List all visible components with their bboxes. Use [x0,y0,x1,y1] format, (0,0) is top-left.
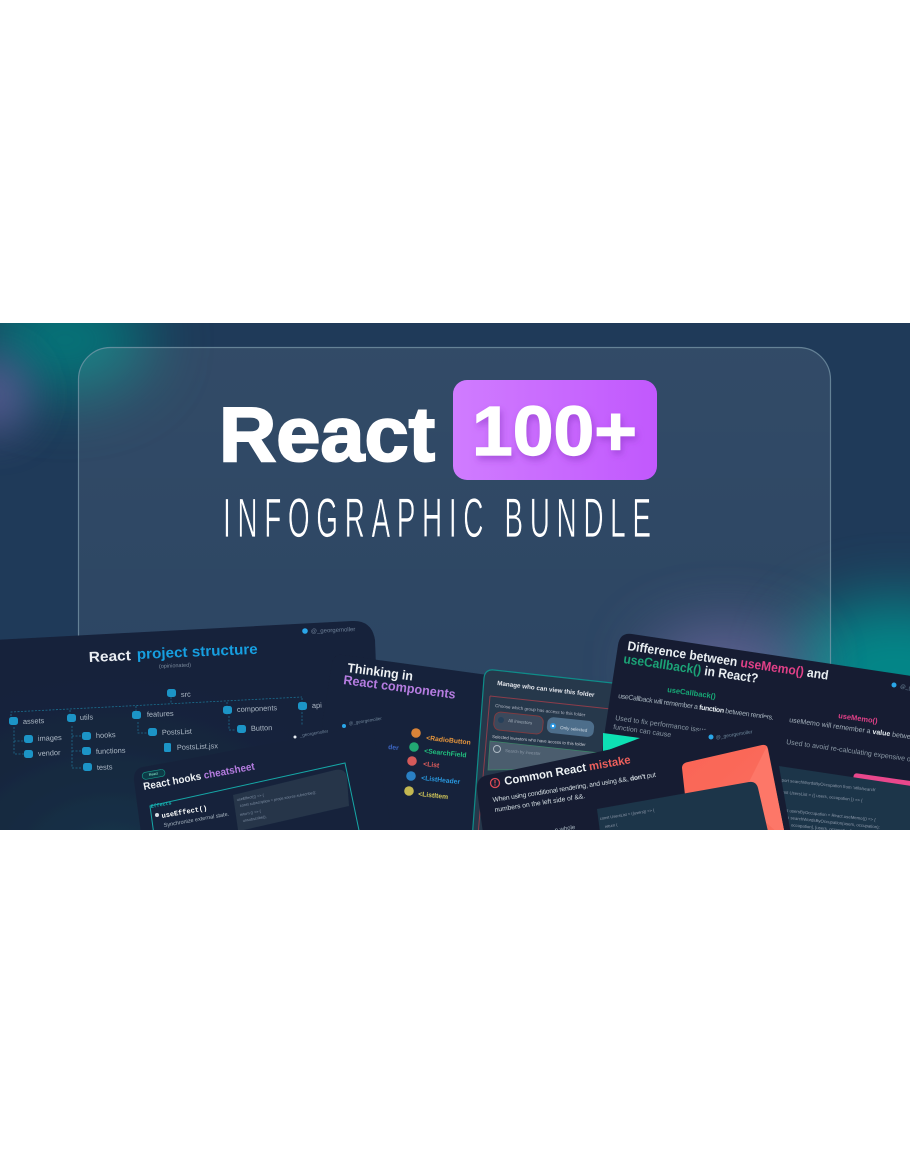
heading: Difference between useMemo() and [627,638,830,683]
heading accent: project structure [136,642,258,663]
icon: twitter [294,736,296,738]
code: const subscription = props.source.subscribe(); [239,791,317,808]
folder tree: PostsList.jsx [177,741,218,752]
code: import searchWordsByOccupation from 'utils/search' [777,777,877,792]
handle: @_georgemoller [715,729,753,741]
heading accent: React components [343,672,457,702]
handle: @_georgemoller [311,627,355,635]
helper text: Selected investors who have access to this folder [492,734,586,747]
code [236,791,317,823]
icon: twitter [302,628,308,634]
description line 2: numbers on the left side of &&. [494,793,586,814]
hook name: useEffect() [161,805,208,821]
code: const usersByOccupation = React.useMemo(() => { [778,807,876,822]
icon: warning [490,778,500,788]
folder tree: Button [251,723,272,733]
code: const UsersList = ({users}) => { [599,807,655,821]
icon: twitter [342,724,346,728]
panel: project structure [0,621,376,830]
option: all investors: All investors [508,718,533,726]
panel: manage access form [472,669,612,830]
folder tree: assets [23,716,45,726]
heading: Common React mistake [503,754,632,788]
option: all investors [493,712,544,735]
glass panel [78,346,832,682]
panel: common mistake [477,718,792,840]
code: return () => { [239,809,262,817]
folder tree: functions [96,746,126,756]
subtitle: INFOGRAPHIC BUNDLE [223,488,651,550]
title: React: React [219,392,435,478]
code [599,807,655,835]
option: only selected [546,717,595,737]
component list: <ListItem [418,791,448,801]
form title: Manage who can view this folder [497,680,595,699]
code: return ( [604,822,619,829]
note: (opinionated) [159,663,191,670]
component list: <ListHeader [421,775,461,786]
infographic previews [0,621,910,830]
label: useMemo: useMemo() [838,711,879,726]
icon: twitter [892,682,896,688]
cut-off text: n whole [554,825,576,834]
infographic banner [0,323,910,830]
usage: Used to fix performance issues [615,715,711,735]
heading: React [88,648,131,666]
search field [488,741,600,770]
folder tree: images [38,733,62,743]
description: Synchronize external state. [163,811,230,829]
component list: <List [423,761,440,770]
search field: Search by investor [505,748,541,756]
heading line 2: useCallback() in React? [623,651,759,686]
prompt: Choose which group has access to this folder [495,703,586,718]
code block [597,782,770,840]
section label: Effects [150,800,172,810]
heading: Thinking in [347,660,414,684]
folder tree [9,689,322,772]
description: useCallback will remember a function between renders. [618,693,774,722]
code box [233,770,349,830]
heading: React hooks cheatsheet [143,761,256,793]
code: unsubscribe(); [242,815,267,823]
option: only selected: Only selected [560,725,588,733]
component list: der [388,744,399,752]
folder tree: PostsList [162,727,192,737]
code panel [770,765,910,840]
folder tree: src [181,690,191,699]
folder tree: features [147,709,174,719]
folder tree: hooks [96,730,116,740]
tag: React [148,771,158,777]
frame [150,762,360,830]
pink button [853,773,910,790]
component list: <RadioButton [426,735,471,747]
code: <div> [611,828,622,835]
folder tree: vendor [38,748,61,758]
bullet [155,813,159,817]
label: useCallback: useCallback() [667,685,717,701]
panel: hooks cheatsheet [136,730,360,830]
code: const UsersList = ({ users, occupation }) => { [778,789,863,803]
folder tree: utils [80,712,94,722]
component list: <SearchField [424,748,467,759]
coral panel [682,745,786,840]
code: return searchWordsByOccupation(users, occupation); [778,814,880,830]
icon: twitter [708,734,714,740]
code: useEffect(() => { [236,793,265,802]
panel: thinking in components [342,660,484,830]
folder tree: tests [97,762,113,772]
panel: useMemo vs useCallback [590,634,910,840]
red frame [478,696,608,830]
teal shape [603,733,640,752]
description: When using conditional rendering, and using &&, don't put [492,772,657,804]
handle: _georgemoller [298,728,329,738]
badge: 100+ [453,380,657,480]
usage line 2: function can cause [613,724,672,739]
badge: 100+: 100+ [472,392,637,470]
folder tree: api [312,701,322,710]
tag [142,769,166,780]
handle: @_georgemoller [348,716,383,726]
code [777,777,880,834]
code: users, occupation], [users, occupation]); [778,821,854,834]
background [0,323,910,830]
folder tree: components [237,703,278,714]
component list [388,728,471,801]
